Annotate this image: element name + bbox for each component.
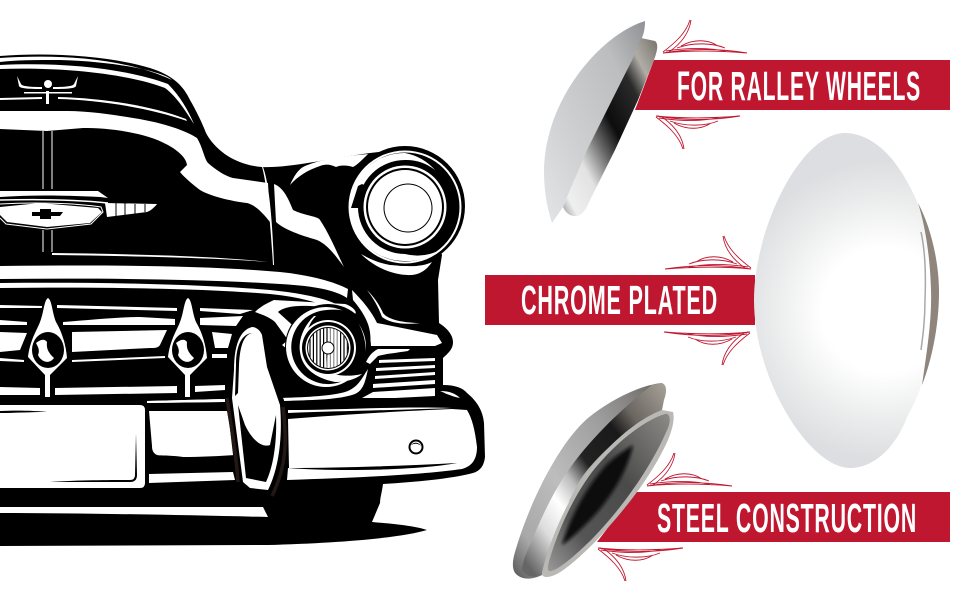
hubcap: chrome plated bbox=[754, 133, 939, 468]
hubcap: steel construction bbox=[513, 383, 674, 579]
hood emblem with bowtie bbox=[0, 191, 157, 229]
pinstripe arrow: banner 3 top bbox=[647, 453, 732, 486]
car silhouette with ground shadow bbox=[0, 54, 485, 546]
parking light bbox=[285, 304, 371, 390]
banner: chrome plated: CHROME PLATED bbox=[521, 277, 718, 323]
dome bbox=[513, 383, 662, 579]
hood centre strip and seam bbox=[42, 131, 274, 265]
rear-view mirror bbox=[17, 76, 78, 104]
bumper right section bbox=[287, 391, 477, 480]
dome bbox=[754, 133, 938, 468]
inner bowl bbox=[548, 414, 670, 571]
hubcap: for ralley wheels bbox=[544, 21, 657, 223]
licence plate panel bbox=[0, 405, 145, 488]
banner: chrome plated bbox=[485, 275, 755, 325]
fender crease highlights bbox=[274, 154, 432, 275]
grille bullet left bbox=[25, 295, 70, 399]
chrome trim stripes bbox=[0, 266, 348, 310]
windshield frame highlights bbox=[0, 57, 194, 124]
grille bars bbox=[0, 305, 253, 403]
fender surround trim bbox=[352, 290, 442, 346]
centre bumper panels bbox=[147, 399, 235, 483]
rim streak bbox=[921, 232, 925, 350]
rim reflection bbox=[918, 203, 939, 385]
bowl shadow bbox=[562, 445, 633, 545]
main headlight bbox=[345, 146, 465, 266]
parking light housing trim bbox=[255, 300, 356, 349]
pinstripe arrow: banner 1 bottom bbox=[656, 116, 740, 149]
bottom sill highlight bbox=[0, 507, 268, 517]
pinstripe arrow: banner 2 bottom bbox=[664, 332, 750, 365]
outer band bbox=[522, 383, 666, 577]
dome bbox=[544, 21, 645, 223]
bumper guard bbox=[226, 322, 287, 497]
hood highlight bbox=[0, 111, 270, 222]
pinstripe arrow: banner 2 top bbox=[665, 236, 751, 269]
illustration: classic car front bbox=[0, 54, 485, 546]
grille bullet right bbox=[165, 295, 210, 399]
pinstripe arrow: banner 3 bottom bbox=[598, 548, 683, 581]
inner rim bbox=[542, 410, 674, 577]
rim bbox=[563, 38, 657, 216]
pinstripe arrow: banner 1 top bbox=[663, 20, 747, 53]
side chrome grille fins bbox=[281, 349, 435, 401]
